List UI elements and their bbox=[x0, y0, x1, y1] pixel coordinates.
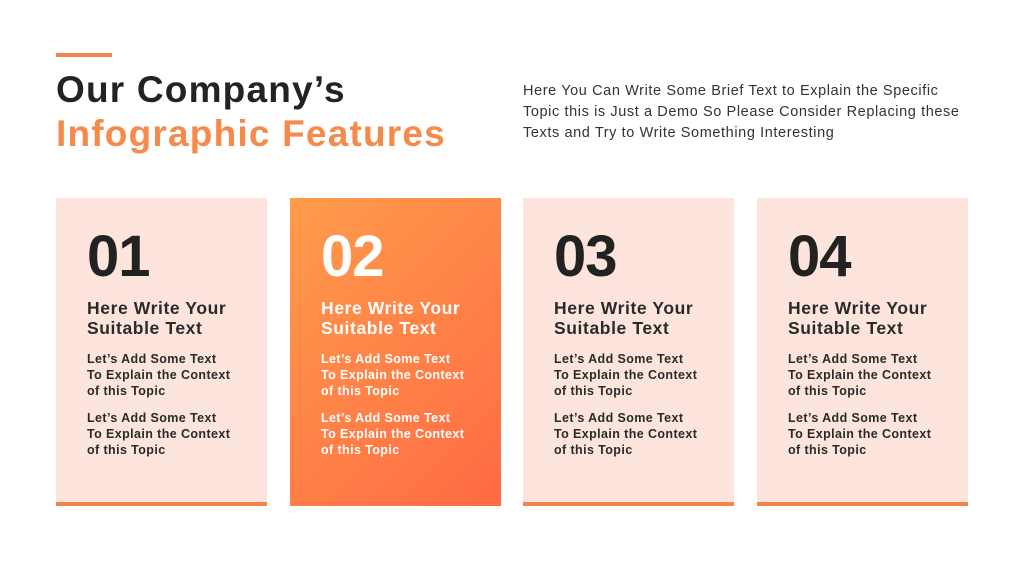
card 03: of this Topic bbox=[554, 443, 633, 457]
card 04: of this Topic bbox=[788, 384, 867, 398]
card 03 bbox=[523, 198, 734, 506]
intro text bbox=[523, 83, 960, 141]
accent bar bbox=[56, 53, 112, 57]
intro text: Topic this is Just a Demo So Please Consider Replacing these bbox=[523, 104, 960, 120]
title bbox=[56, 69, 446, 154]
card 01: Let’s Add Some Text bbox=[87, 352, 216, 366]
card 01: Let’s Add Some Text bbox=[87, 411, 216, 425]
card 01: Suitable Text bbox=[87, 318, 202, 338]
card 01: of this Topic bbox=[87, 384, 166, 398]
title: Our Company’s bbox=[56, 69, 346, 110]
card 04: Here Write Your bbox=[788, 298, 927, 318]
card 04: Let’s Add Some Text bbox=[788, 411, 917, 425]
card 04: To Explain the Context bbox=[788, 427, 931, 441]
card 03: Let’s Add Some Text bbox=[554, 411, 683, 425]
card 02 highlighted: Here Write Your bbox=[321, 298, 460, 318]
card 02 highlighted: Let’s Add Some Text bbox=[321, 352, 450, 366]
intro text: Here You Can Write Some Brief Text to Explain the Specific bbox=[523, 83, 938, 99]
intro text: Texts and Try to Write Something Interesting bbox=[523, 125, 834, 141]
card 04: of this Topic bbox=[788, 443, 867, 457]
card 04: Let’s Add Some Text bbox=[788, 352, 917, 366]
title: Infographic Features bbox=[56, 113, 446, 154]
card 04: To Explain the Context bbox=[788, 368, 931, 382]
card 01: Here Write Your bbox=[87, 298, 226, 318]
card 01: To Explain the Context bbox=[87, 368, 230, 382]
card 03: To Explain the Context bbox=[554, 368, 697, 382]
card 02 highlighted: of this Topic bbox=[321, 443, 400, 457]
card 04: 04 bbox=[788, 224, 851, 289]
card 02 highlighted: of this Topic bbox=[321, 384, 400, 398]
card 03: of this Topic bbox=[554, 384, 633, 398]
card 02 highlighted: To Explain the Context bbox=[321, 368, 464, 382]
card 03: Here Write Your bbox=[554, 298, 693, 318]
card 03: To Explain the Context bbox=[554, 427, 697, 441]
card 01 bbox=[56, 198, 267, 506]
card 04 bbox=[757, 198, 968, 506]
card 03: 03 bbox=[554, 224, 617, 289]
card 02 highlighted: 02 bbox=[321, 224, 384, 289]
card 02 highlighted: To Explain the Context bbox=[321, 427, 464, 441]
card 01: To Explain the Context bbox=[87, 427, 230, 441]
card 01: of this Topic bbox=[87, 443, 166, 457]
card 04: Suitable Text bbox=[788, 318, 903, 338]
card 03: Let’s Add Some Text bbox=[554, 352, 683, 366]
card 02 highlighted: Let’s Add Some Text bbox=[321, 411, 450, 425]
card 02 highlighted: Suitable Text bbox=[321, 318, 436, 338]
card 02 highlighted bbox=[290, 198, 501, 506]
card 03: Suitable Text bbox=[554, 318, 669, 338]
card 01: 01 bbox=[87, 224, 150, 289]
